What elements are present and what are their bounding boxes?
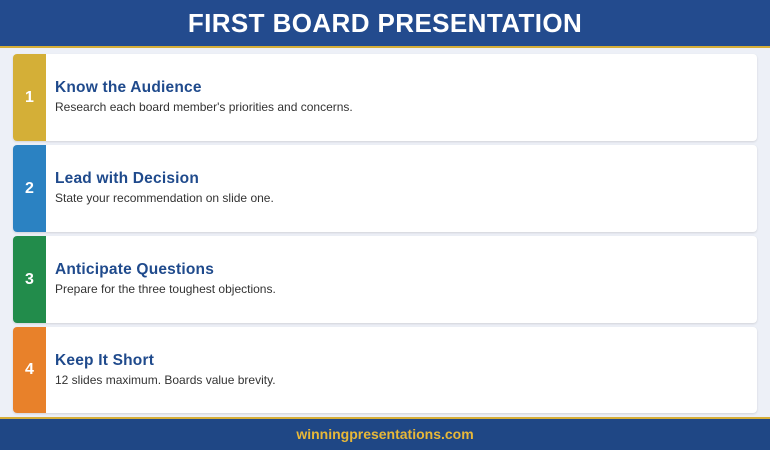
description 3: Prepare for the three toughest objections. [55, 282, 276, 296]
number badge 2: 2 [25, 180, 34, 197]
heading 2: Lead with Decision [55, 170, 199, 187]
description 4: 12 slides maximum. Boards value brevity. [55, 373, 276, 387]
number badge 1 [13, 54, 46, 141]
footer: winningpresentations.com [296, 426, 474, 442]
number badge 1: 1 [25, 89, 34, 106]
heading 3: Anticipate Questions [55, 261, 214, 278]
heading 4: Keep It Short [55, 352, 154, 369]
number badge 3: 3 [25, 271, 34, 288]
number badge 4 [13, 327, 46, 413]
description 1: Research each board member's priorities and concerns. [55, 100, 353, 114]
title [0, 0, 770, 48]
number badge 2 [13, 145, 46, 232]
card 2 [13, 145, 757, 232]
title: FIRST BOARD PRESENTATION [188, 8, 582, 38]
description 2: State your recommendation on slide one. [55, 191, 274, 205]
heading 1: Know the Audience [55, 79, 202, 96]
card 3 [13, 236, 757, 323]
card 1 [13, 54, 757, 141]
footer [0, 417, 770, 450]
number badge 4: 4 [25, 361, 34, 378]
number badge 3 [13, 236, 46, 323]
card 4 [13, 327, 757, 413]
